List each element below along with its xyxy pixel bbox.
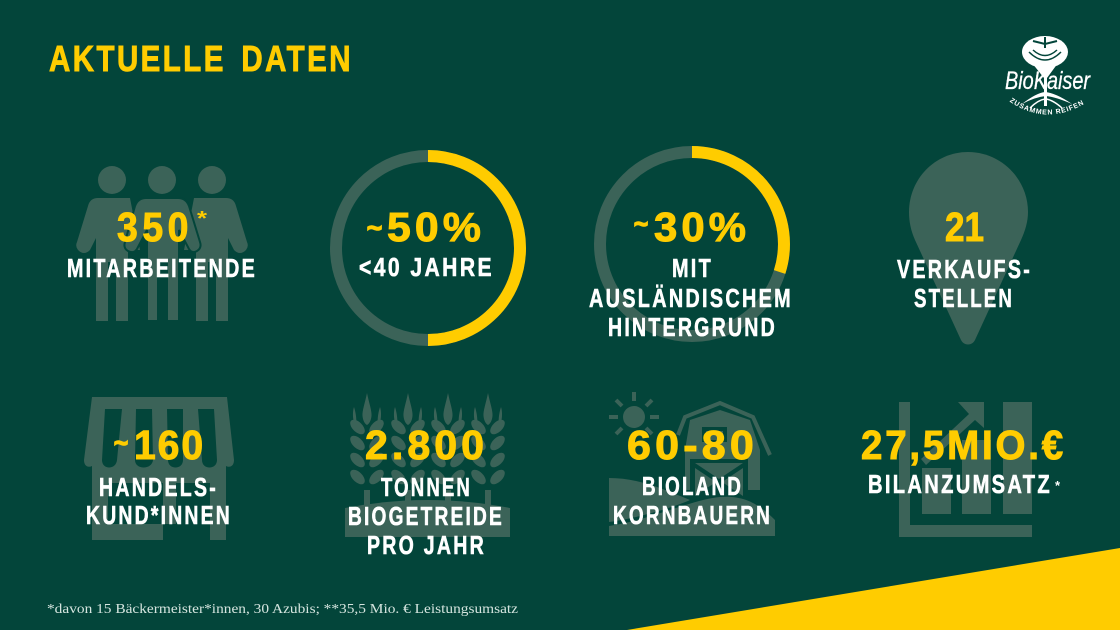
stat: Bilanzumsatz: [861, 402, 1066, 537]
label: VERKAUFS-: [897, 254, 1032, 284]
label: [589, 253, 793, 342]
label: MITARBEITENDE: [67, 253, 257, 283]
label: [897, 254, 1032, 313]
value: 60-80: [627, 422, 758, 468]
icon: map pin: [909, 152, 1028, 344]
stat: Verkaufsstellen: [897, 152, 1032, 344]
value: ~: [367, 215, 382, 242]
logo wordmark: BioKaiser: [1005, 67, 1091, 95]
value: ~: [634, 211, 648, 238]
stat: Biogetreide: [345, 393, 510, 560]
icon: wheat field: [345, 393, 510, 537]
ring 30 percent: [600, 152, 784, 336]
value: 160: [134, 422, 205, 468]
label: HANDELS-: [99, 472, 218, 502]
label: KORNBAUERN: [613, 500, 772, 530]
value: 350: [117, 204, 193, 250]
title: AKTUELLE DATEN: [49, 38, 353, 79]
label: BIOGETREIDE: [348, 501, 504, 531]
value: 50%: [387, 204, 485, 250]
label: BIOLAND: [642, 471, 743, 501]
label: [348, 472, 504, 560]
label: STELLEN: [914, 283, 1014, 313]
icon: barn and sun: [609, 392, 775, 536]
label: MIT: [672, 253, 713, 283]
label: TONNEN: [381, 472, 472, 502]
yellow corner wedge: [627, 548, 1120, 630]
stat: Handelskunden: [84, 397, 234, 540]
ring 50 percent: [336, 156, 520, 340]
value: 2.800: [365, 422, 488, 468]
label: KUND*INNEN: [86, 500, 232, 530]
stat: Mitarbeitende: [67, 166, 257, 321]
logo tagline: ZUSAMMEN REIFEN: [1010, 98, 1084, 114]
value: 21: [945, 204, 984, 250]
label: PRO JAHR: [367, 530, 486, 560]
stat: under 40: [336, 156, 520, 340]
icon: shop: [84, 397, 234, 540]
label: <40 JAHRE: [359, 252, 494, 282]
logo: BioKaiser: [1005, 36, 1091, 114]
asterisk: *: [1055, 478, 1061, 493]
value: 30%: [654, 204, 750, 250]
label: AUSLÄNDISCHEM: [589, 283, 793, 313]
icon: bar chart with arrow: [899, 402, 1032, 537]
label: HINTERGRUND: [608, 312, 777, 342]
stat: Kornbauern: [609, 392, 775, 536]
label: [613, 471, 772, 530]
footnote: *davon 15 Bäckermeister*innen, 30 Azubis; **35,5 Mio. € Leistungsumsatz: [47, 602, 518, 617]
label: [86, 472, 232, 530]
value: ~: [114, 430, 128, 457]
icon: three people: [76, 166, 248, 321]
asterisk: *: [197, 208, 207, 230]
label: BILANZUMSATZ: [868, 469, 1052, 499]
stat: foreign background: [589, 152, 793, 342]
value: 27,5MIO.€: [861, 422, 1066, 468]
logo emblem: [1022, 36, 1072, 108]
